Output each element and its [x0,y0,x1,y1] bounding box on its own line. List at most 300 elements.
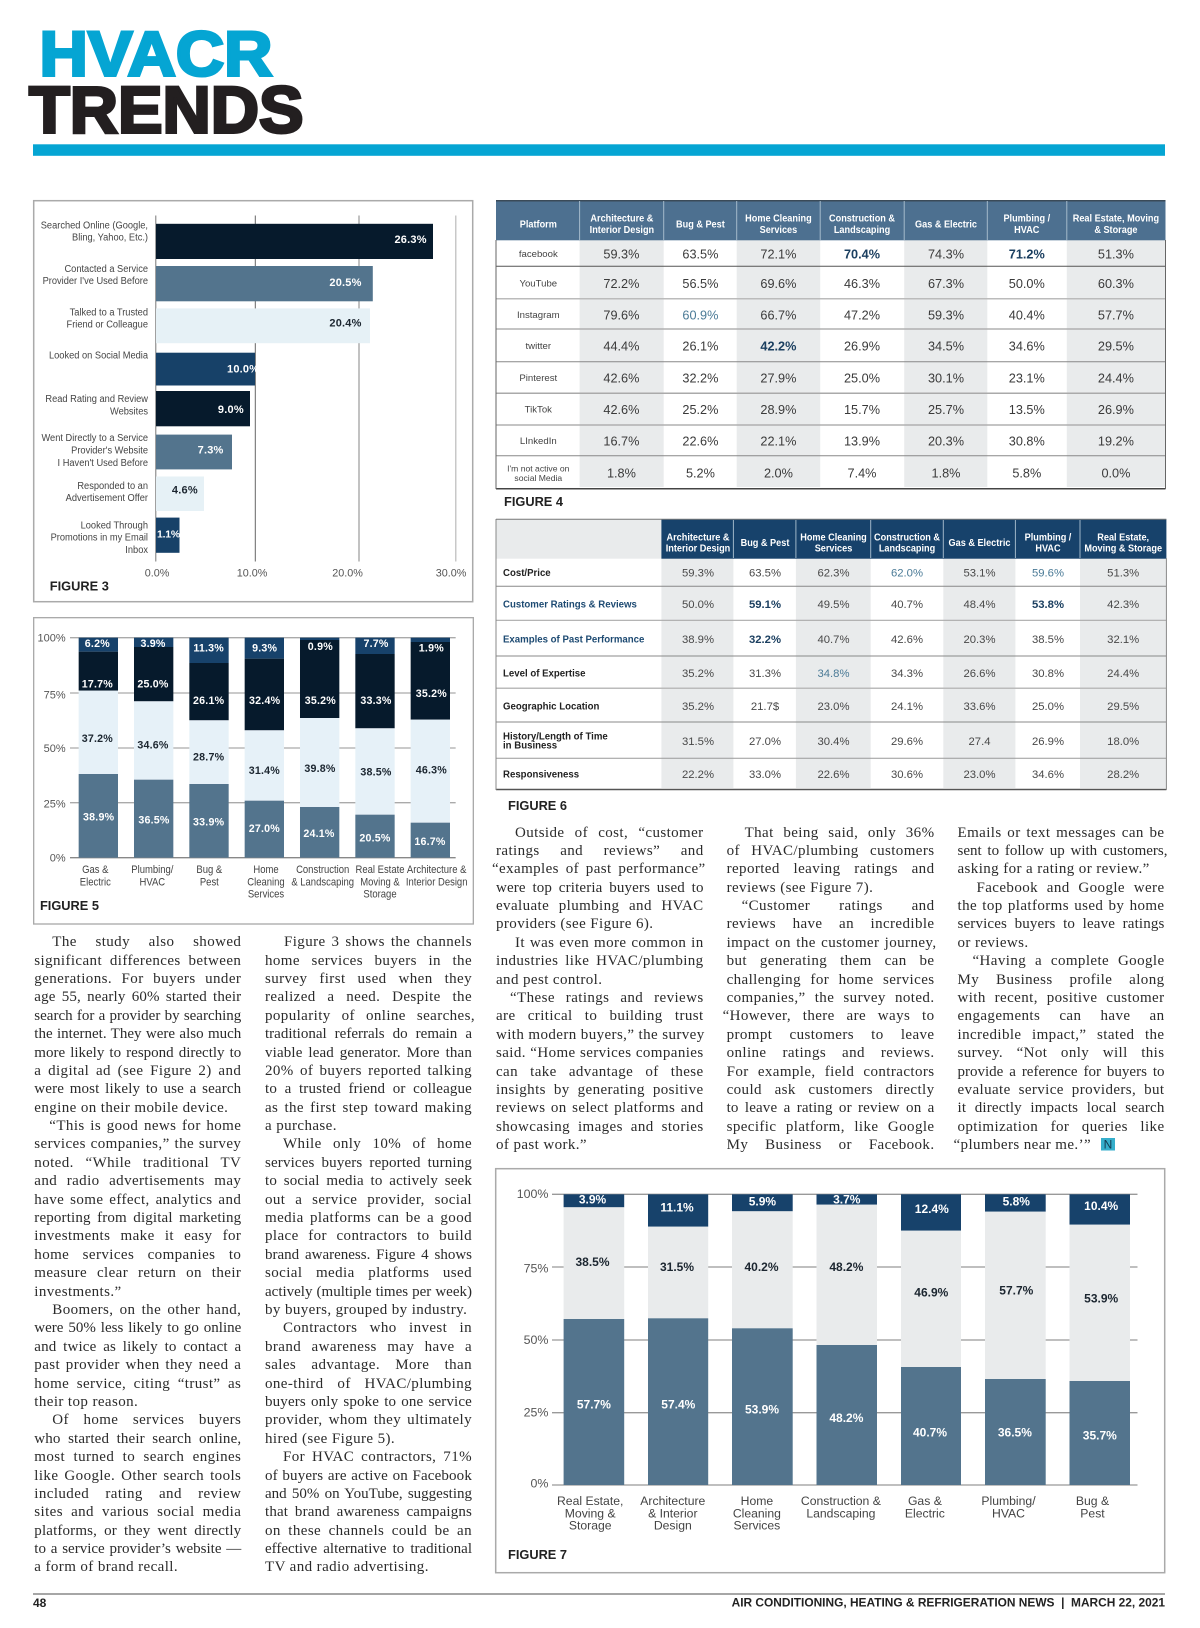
text block: column 3: of past work.” [496,1137,587,1153]
text block: column 4: prompt customers to leave [727,1027,934,1043]
title: TRENDS [29,73,304,146]
text block: column 5: services buyers to leave ratings [958,916,1164,932]
table values: 71.2% [1009,247,1045,262]
bar values: 26.3% [394,234,427,246]
text block: column 1: investments.” [34,1284,122,1300]
bar values: 53.9% [745,1402,779,1416]
category labels: Home [741,1494,773,1508]
bar values [575,1193,1119,1442]
header row: Home Cleaning [745,213,812,225]
header row: & Storage [1094,224,1138,236]
text block: column 5: sent to follow up with customers, [958,843,1168,859]
text block: column 1: The study also showed [52,934,241,950]
text block: column 1: measure clear return on their [34,1265,241,1281]
table values: 22.2% [682,769,714,781]
header row: Plumbing / [1025,532,1072,544]
bar values: 9.0% [218,404,244,416]
table values: 38.9% [682,634,714,646]
panel: figure 7 stacked bars [496,1169,1165,1573]
text block: column 1: included rating and review [34,1486,241,1502]
platform labels: Pinterest [519,373,558,384]
text block: column 4: online ratings and reviews. [727,1045,934,1061]
table values: 28.9% [760,403,796,417]
table values: 42.6% [603,372,639,386]
text block: column 1: search for a provider by searching [34,1008,241,1024]
table values: 24.4% [1098,372,1134,386]
table values: 34.3% [891,668,923,680]
table values: 24.4% [1107,668,1139,680]
bar values: 36.5% [998,1426,1032,1440]
bars [156,224,433,553]
title [29,20,304,146]
text block: column 1: to a service provider’s website — [34,1541,241,1557]
header row: Interior Design [590,224,654,236]
category labels: Provider's Website [71,445,148,457]
text block: column 2: viable lead generator. More than [265,1045,472,1061]
table values: 26.6% [963,668,996,680]
category labels: Bug & [1076,1494,1109,1508]
table values: 26.1% [682,340,718,354]
category labels: Searched Online (Google, [41,220,148,232]
text block: column 2: effective alternative to traditional [265,1541,472,1557]
table values: 40.4% [1009,309,1045,323]
table values: 50.0% [682,599,714,611]
table values: 13.9% [844,435,880,449]
text block: column 3: Outside of cost, “customer [515,824,704,840]
table values: 32.2% [749,634,781,646]
category labels: Friend or Colleague [67,319,148,331]
table values: 62.3% [817,568,850,580]
table values: 5.8% [1012,467,1041,481]
bar values: 11.1% [660,1200,694,1214]
y axis labels [517,1187,548,1491]
text block: column 1: most turned to search engines [34,1449,241,1465]
text block: column 5: or reviews. [958,935,1029,951]
bar values: 5.9% [749,1194,776,1208]
category labels [80,865,467,901]
category labels: Real Estate [355,865,405,876]
header row: Construction & [829,213,895,225]
table values: 26.9% [844,340,880,354]
table values: 67.3% [928,277,964,291]
table values: 2.0% [764,467,793,481]
axis labels: 20.0% [332,567,363,579]
y axis labels [38,633,66,864]
header row [496,200,1166,240]
bar values: 57.4% [661,1398,696,1412]
bar values: 7.3% [198,444,224,456]
text block: column 4: That being said, only 36% [745,824,934,840]
text block: column 2: that brand awareness campaigns [265,1504,472,1520]
table values: 20.3% [928,435,964,449]
table values: 42.6% [891,634,923,646]
bar values: 4.6% [172,485,198,497]
category labels: Provider I've Used Before [43,276,148,287]
platform labels [507,249,570,483]
category labels: Moving & [565,1506,616,1520]
figure label: FIGURE 6 [508,798,567,813]
category labels: Pest [1080,1506,1105,1520]
text block: column 2: buyers only spoke to one service [265,1394,472,1410]
text block: column 3: said. “Home services companies [496,1045,704,1061]
table values: 70.4% [844,247,880,262]
table values: 33.0% [749,769,781,781]
table values: 15.7% [844,403,880,417]
text block: column 2: out a service provider, social [265,1192,472,1208]
category labels: Real Estate, [557,1494,623,1508]
bar values: 53.9% [1084,1292,1119,1306]
text block: column 2: provider, whom they ultimately [265,1412,472,1428]
text block: column 2: a purchase. [265,1118,337,1134]
row labels: Responsiveness [503,770,580,781]
table values: 13.5% [1009,403,1045,417]
bar values: 57.7% [577,1398,611,1412]
table values: 25.7% [928,403,964,417]
bar values: 31.4% [249,765,280,777]
header row: Architecture & [667,532,729,544]
bar values: 9.3% [252,643,278,655]
text block: column 3: “examples of past performance” [492,861,706,877]
text block: column 5 [954,824,1168,1153]
text block: column 1: a digital ad (see Figure 2) and [34,1063,241,1079]
table values: 74.3% [928,247,964,262]
table values: 44.4% [603,340,639,354]
text block: column 4: “Customer ratings and [742,898,934,914]
text block: column 4: but generating them can be [727,953,934,969]
table values: 23.1% [1009,372,1045,386]
table values: 29.5% [1098,340,1134,354]
text block: column 2: For HVAC contractors, 71% [283,1449,472,1465]
text block: column 2: social media platforms used [265,1265,472,1281]
bar values: 20.5% [329,277,362,289]
platform labels: facebook [519,249,558,260]
bar values: 3.7% [833,1193,861,1207]
category labels: Promotions in my Email [51,532,148,544]
category labels: Looked Through [81,520,148,531]
bar values: 33.9% [193,816,225,828]
table values: 79.6% [603,309,639,323]
header row: Bug & Pest [741,537,790,549]
platform labels: I'm not active on [507,464,570,474]
table values: 1.8% [607,467,636,481]
header row: Landscaping [834,224,890,236]
icon: end-of-article N mark: N [1104,1138,1112,1152]
text block: column 4: companies,” the survey noted. [727,990,934,1006]
text block: column 1: home services companies to [34,1247,241,1263]
text block: column 2: actively (multiple times per week) [265,1284,472,1300]
bar values: 6.2% [85,638,110,650]
text block: column 1: were most likely to use a search [34,1081,241,1097]
table values: 72.2% [603,277,639,291]
stacked bars [79,638,450,858]
panel: figure 5 stacked bars [34,618,473,924]
bar values: 7.7% [363,638,389,650]
bar values: 36.5% [138,814,170,826]
header row: Gas & Electric [949,537,1011,549]
bar values: 17.7% [82,678,113,690]
text block: column 2: by buyers, grouped by industry. [265,1302,467,1318]
category labels: Design [654,1519,692,1533]
text block: column 1: engine on their mobile device. [34,1100,228,1116]
header row: HVAC [1014,224,1039,236]
bar values: 3.9% [140,638,166,650]
axis labels: 0.0% [145,567,170,579]
category labels: HVAC [992,1506,1025,1520]
table values: 63.5% [749,568,781,580]
bar values: 28.7% [193,752,225,764]
table values: 51.3% [1107,568,1139,580]
text block: column 1: reporting from digital marketing [34,1210,241,1226]
text block: column 4: of HVAC/plumbing customers [727,843,934,859]
bar values: 27.0% [249,823,280,835]
text block: column 2: place for contractors to build [265,1228,472,1244]
bar values [82,638,447,848]
category labels: Gas & [908,1494,942,1508]
text block: column 3: showcasing images and stories [496,1119,704,1135]
header row [496,519,1166,559]
bar values: 33.3% [360,695,392,707]
table values: 18.0% [1107,736,1139,748]
text block: column 2: Figure 3 shows the channels [284,934,472,950]
text block: column 2: traditional referrals do remain a [265,1026,472,1042]
text block: column 2: brand awareness. Figure 4 shows [265,1247,472,1263]
table values: 27.0% [749,736,781,748]
text block: column 1: more likely to respond directly to [34,1045,241,1061]
table values: 59.3% [928,309,964,323]
shaded columns [580,240,1166,487]
table values: 32.1% [1107,634,1139,646]
text block: column 2: to social media to actively seek [265,1173,472,1189]
bar values: 46.3% [416,765,447,777]
text block: column 1: “This is good news for home [49,1118,241,1134]
row labels: Customer Ratings & Reviews [503,599,637,610]
table values: 30.8% [1009,435,1045,449]
category labels: Talked to a Trusted [70,307,148,319]
text block: column 1: the internet. They were also much [34,1026,241,1042]
table values: 30.6% [891,769,923,781]
category labels: Responded to an [77,480,148,492]
table values: 5.2% [686,467,715,481]
title: HVACR [40,20,272,90]
y axis labels: 75% [44,689,66,701]
row rules [496,519,1166,790]
text block: column 2: and 50% on YouTube, suggesting [265,1486,472,1502]
text block: column 4: “However, there are ways to [723,1008,934,1024]
text block: column 1: investments make it easy for [34,1228,241,1244]
table values: 25.0% [1032,701,1064,713]
text block: column 3: industries like HVAC/plumbing [496,953,704,969]
table values: 1.8% [932,467,960,481]
header row: Services [760,224,798,236]
category labels [41,220,149,556]
table values: 72.1% [760,247,796,262]
text block: column 3: and pest control. [496,972,602,988]
text block: column 2: While only 10% of home [283,1136,472,1152]
bar values: 39.8% [304,763,336,775]
table values: 23.0% [817,701,850,713]
row labels: History/Length of Time [503,731,608,742]
table values: 46.3% [844,277,880,291]
header row: Platform [520,219,557,231]
category labels: Looked on Social Media [49,350,149,362]
text block: column 2: one-third of HVAC/plumbing [265,1376,472,1392]
bar values: 35.2% [305,695,336,707]
text block: column 4: challenging for home services [727,972,934,988]
bar values: 31.5% [660,1260,694,1274]
text block: column 1: Of home services buyers [52,1412,241,1428]
text block: column 3: reviews on select platforms and [496,1100,704,1116]
y axis labels: 25% [44,798,66,810]
table values: 38.5% [1032,634,1064,646]
stacked bars [564,1194,1130,1485]
category labels: Cleaning [733,1506,781,1520]
table values: 25.2% [682,403,718,417]
table values: 42.3% [1107,599,1139,611]
text block: column 5: optimization for queries like [958,1119,1164,1135]
header row: Real Estate, Moving [1073,213,1159,225]
text block: column 1: age 55, nearly 60% started their [34,989,241,1005]
text block: column 4: reviews (see Figure 7). [727,880,873,896]
category labels: HVAC [140,877,165,888]
table values: 28.2% [1107,769,1139,781]
icon: end-of-article N mark [1101,1138,1115,1152]
text block: column 2: hired (see Figure 5). [265,1431,395,1447]
text block: column 5: engagements can have an [958,1008,1164,1024]
row labels: Geographic Location [503,701,599,712]
category labels: Inbox [125,544,148,556]
header row: Interior Design [666,543,730,555]
table values: 30.4% [817,736,850,748]
text block: column 3: It was even more common in [515,935,704,951]
category labels: Landscaping [806,1506,875,1520]
table values: 66.7% [760,309,796,323]
text block: column 3: were top criteria buyers used to [496,880,704,896]
bar values: 10.0% [227,363,259,375]
title rule [33,144,1165,156]
table values: 59.1% [749,599,781,611]
text block: column 5: Emails or text messages can be [958,824,1164,840]
table values: 56.5% [682,277,718,291]
text block: column 5: evaluate service providers, but [958,1082,1164,1098]
text block: column 5: survey. “Not only will this [958,1045,1164,1061]
platform labels: LInkedIn [520,436,557,447]
bar values: 11.3% [193,643,224,655]
table values: 40.7% [891,599,923,611]
table values: 34.8% [817,668,850,680]
table values: 60.9% [682,309,718,323]
text block: column 3: evaluate plumbing and HVAC [496,898,704,914]
text block: column 2 [265,934,475,1575]
text block: column 2: media platforms can be a good [265,1210,472,1226]
figure label: FIGURE 3 [50,578,109,594]
header row: Bug & Pest [676,219,725,231]
bar values: 16.7% [414,836,446,848]
text block: column 4: impact on the customer journey, [727,935,936,951]
text block: column 5: it directly impacts local search [958,1100,1164,1116]
table values: 69.6% [760,277,796,291]
table values: 31.5% [682,736,714,748]
text block: column 4: reviews have an incredible [727,916,934,932]
category labels: Read Rating and Review [45,394,149,405]
text block: column 2: brand awareness may have a [265,1339,472,1355]
table values: 7.4% [848,467,876,481]
bar values: 26.1% [193,695,225,707]
text block: column 5: “plumbers near me.’” [954,1137,1091,1153]
table values: 60.3% [1098,277,1134,291]
text block: column 1: home service, citing “trust” as [34,1376,241,1392]
y axis labels: 0% [530,1477,548,1491]
table values: 21.7$ [751,701,780,713]
table values: 30.8% [1032,668,1064,680]
text block: column 3: are critical to building trust [496,1008,704,1024]
text block: column 1: sites and various social media [34,1504,241,1520]
bar values: 38.9% [83,811,115,823]
row labels: Cost/Price [503,568,551,579]
table values: 0.0% [1101,467,1130,481]
table values: 34.6% [1032,769,1064,781]
category labels: Cleaning [247,877,285,888]
bar values: 0.9% [308,641,333,653]
category labels: Bling, Yahoo, Etc.) [72,232,148,244]
header row: Gas & Electric [915,219,978,231]
footer: AIR CONDITIONING, HEATING & REFRIGERATION NEWS | MARCH 22, 2021 [732,1596,1166,1610]
text block: column 2: to a trusted friend or colleague [265,1081,472,1097]
table values: 19.2% [1098,435,1134,449]
y axis labels: 100% [38,633,66,645]
header row: Services [815,543,853,555]
table values: 27.4 [968,736,990,748]
table values: 31.3% [749,668,781,680]
table values: 24.1% [891,701,923,713]
table values: 29.6% [891,736,923,748]
text block: column 3: insights by generating positive [496,1082,704,1098]
bar values: 10.4% [1084,1199,1119,1213]
text block: column 5: My Business profile along [958,972,1164,988]
bar values: 38.5% [360,767,392,779]
text block: column 1: a form of brand recall. [34,1559,178,1575]
category labels: Services [734,1519,780,1533]
figure label: FIGURE 4 [504,494,564,509]
header row: Construction & [874,532,940,544]
bar values: 24.1% [303,828,335,840]
category labels: Architecture & [407,865,467,876]
category labels: Websites [110,406,148,418]
text block: column 1: past provider when they need a [34,1357,241,1373]
header row: Landscaping [879,543,935,555]
table values: 57.7% [1098,309,1134,323]
table values: 22.6% [682,435,718,449]
figure label: FIGURE 7 [508,1547,567,1562]
category labels: & Interior [648,1506,698,1520]
table values: 27.9% [760,372,796,386]
y axis labels: 50% [524,1333,548,1347]
text block: column 2: popularity of online searches, [265,1008,475,1024]
text block: column 3 [492,824,706,1153]
text block: column 3: can take advantage of these [496,1064,704,1080]
table values: 34.5% [928,340,964,354]
bar values: 48.2% [829,1260,864,1274]
table values: 40.7% [817,634,850,646]
axis labels: 10.0% [237,567,268,579]
text block: column 1: generations. For buyers under [34,971,241,987]
category labels: Moving & [360,877,400,888]
bar values: 35.2% [416,688,447,700]
text block: column 2: home services buyers in the [265,953,472,969]
table values: 29.5% [1107,701,1139,713]
category labels: Contacted a Service [64,264,148,275]
y axis labels: 0% [50,852,66,864]
category labels: Storage [569,1519,612,1533]
